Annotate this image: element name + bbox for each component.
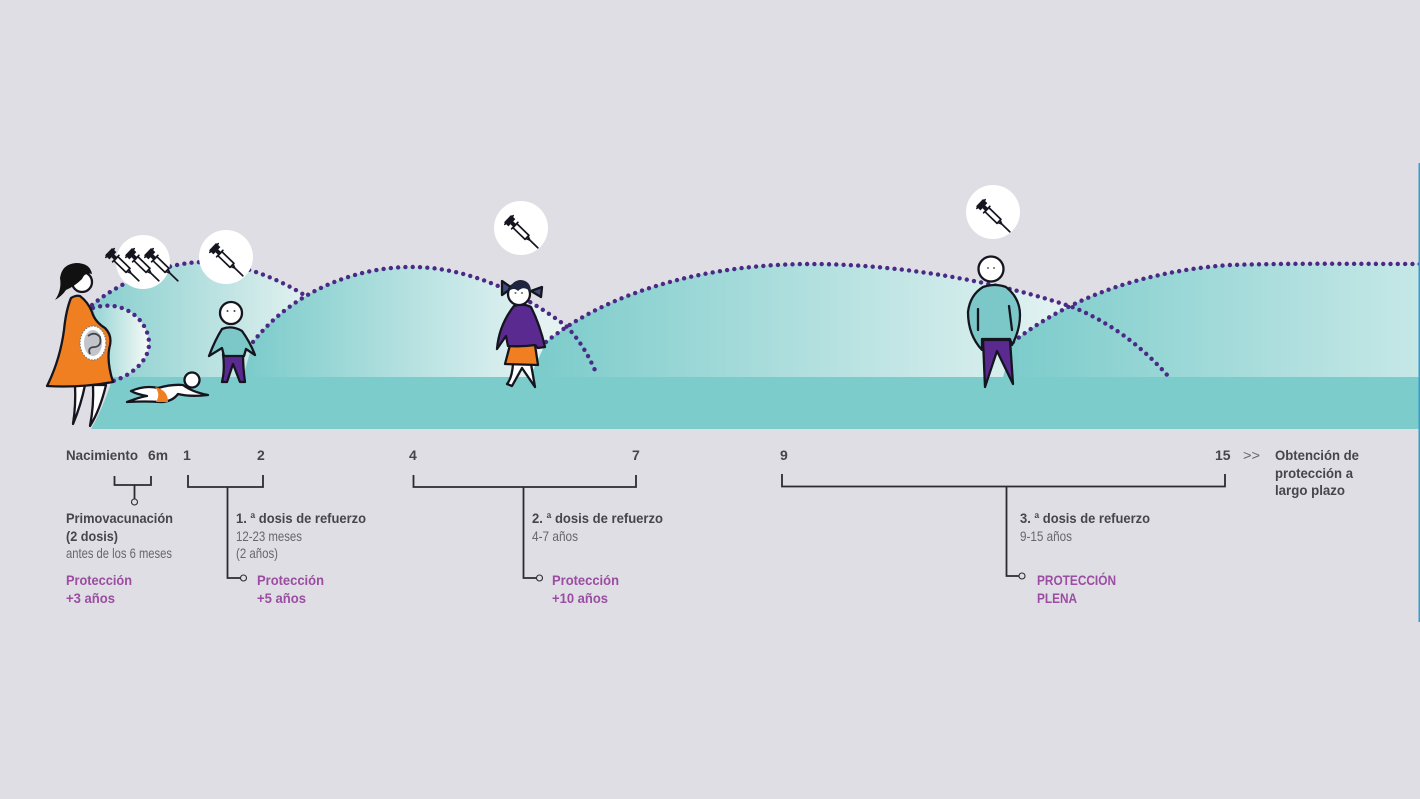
hump: third booster	[1003, 264, 1420, 377]
timeline labels: 9	[780, 447, 788, 463]
timeline labels: Nacimiento	[66, 447, 138, 463]
timeline labels: 6m	[148, 447, 168, 463]
ground band	[91, 377, 1420, 429]
bracket: third booster	[782, 474, 1225, 579]
dotted curve: first doses	[92, 262, 306, 305]
figure: girl	[497, 280, 545, 387]
text: third booster	[1020, 510, 1150, 606]
timeline labels: 15	[1215, 447, 1231, 463]
text: primary vaccination: Protección	[66, 572, 132, 588]
text: third booster: 9-15 años	[1020, 528, 1072, 544]
figure: baby crawling	[127, 372, 208, 402]
long-term protection note: largo plazo	[1275, 482, 1345, 498]
hump: first booster	[243, 267, 597, 377]
icon: vaccine bubble 1	[199, 230, 253, 284]
timeline labels: 4	[409, 447, 417, 463]
dotted curve: maternal protection	[93, 306, 149, 381]
text: third booster: 3. ª dosis de refuerzo	[1020, 510, 1150, 526]
text: third booster: PROTECCIÓN	[1037, 571, 1116, 588]
bracket: first booster	[188, 475, 263, 581]
text: first booster: +5 años	[257, 590, 306, 606]
hump: maternal protection	[93, 306, 149, 381]
timeline labels: >>	[1243, 447, 1260, 463]
icon: fetus	[80, 326, 106, 360]
text: first booster: Protección	[257, 572, 324, 588]
text: first booster: (2 años)	[236, 545, 278, 561]
text: second booster: 2. ª dosis de refuerzo	[532, 510, 663, 526]
bracket: second booster	[414, 475, 636, 581]
long-term protection note: protección a	[1275, 465, 1353, 481]
dotted curve: second booster	[546, 264, 1168, 376]
timeline labels: 1	[183, 447, 191, 463]
hump: first doses	[92, 262, 345, 377]
figure: toddler	[209, 302, 255, 382]
text: second booster: 4-7 años	[532, 528, 578, 544]
figure: pregnant mother	[47, 263, 113, 426]
text: second booster	[532, 510, 663, 606]
long-term protection note: Obtención de	[1275, 447, 1359, 463]
long-term protection note	[1275, 447, 1359, 498]
text: second booster: Protección	[552, 572, 619, 588]
right edge line	[1418, 163, 1420, 622]
text: primary vaccination: +3 años	[66, 590, 115, 606]
text: third booster: PLENA	[1037, 590, 1077, 606]
timeline labels: 7	[632, 447, 640, 463]
hump: second booster	[530, 264, 1168, 377]
text: first booster: 12-23 meses	[236, 528, 302, 544]
timeline labels: 2	[257, 447, 265, 463]
figure: teen	[968, 256, 1020, 387]
text: primary vaccination: Primovacunación	[66, 510, 173, 526]
text: primary vaccination	[66, 510, 173, 606]
text: second booster: +10 años	[552, 590, 608, 606]
bracket: primary vaccination	[114, 476, 151, 505]
text: primary vaccination: (2 dosis)	[66, 528, 118, 544]
icon: vaccine bubble 3	[966, 185, 1020, 239]
text: first booster	[236, 510, 366, 606]
icon: vaccine bubble 2	[494, 201, 548, 255]
timeline labels	[66, 447, 1260, 463]
dotted curve: third booster	[1013, 264, 1420, 342]
dotted curve: first booster	[253, 267, 597, 375]
text: primary vaccination: antes de los 6 meses	[66, 545, 172, 561]
text: first booster: 1. ª dosis de refuerzo	[236, 510, 366, 526]
icon: vaccine bubble triple	[104, 235, 182, 289]
protection humps chart	[91, 262, 1420, 429]
